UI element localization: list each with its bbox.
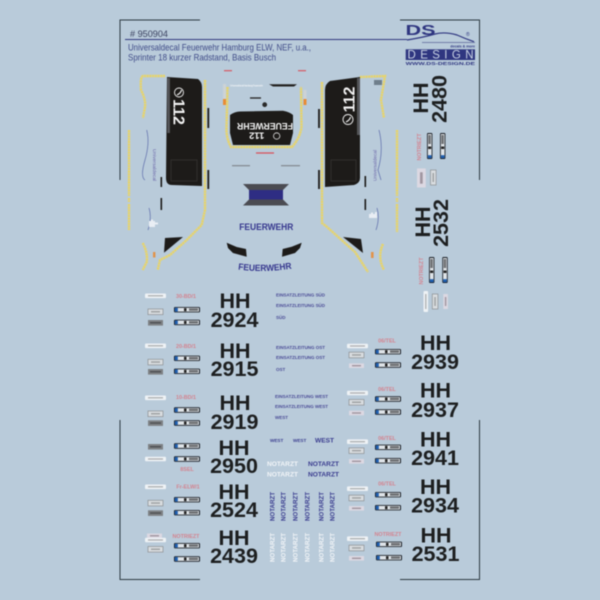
decal row: HH 2524: 2524 [210, 498, 258, 522]
yellow contour lines left [129, 76, 205, 270]
decal row: HH 2439: 2439 [210, 544, 258, 568]
logo: DS Design: DESIGN [408, 50, 474, 62]
decal row: HH 2915: HH [219, 339, 251, 363]
wiper strips [232, 165, 300, 167]
hamburg crest and wave right [376, 130, 381, 230]
decal group: einsatzleitung sud [276, 292, 326, 320]
decal row: HH 2915: 20-BD/1 [176, 344, 196, 350]
hood lettering: 112 [249, 130, 264, 140]
red marker bars [224, 71, 306, 153]
panel: front of vehicle: FEUERWEHR [238, 262, 292, 272]
small dark strips left [207, 108, 209, 189]
rotated decals for 2532: NOTRIEZT [419, 257, 425, 284]
decal row: HH 2919 [145, 391, 258, 434]
phone 112 left [170, 88, 186, 125]
decal group: horizontal notarzt [267, 461, 340, 479]
front details: Universaldecal Hamburg Feuerwehr [230, 84, 263, 88]
decal row: HH 2924: HH [219, 289, 251, 313]
plate number HH 2480 [409, 75, 452, 123]
panel: left side of vehicle [129, 76, 208, 270]
plate number HH 2532 [411, 199, 453, 247]
rotated decals for 2532 [419, 257, 448, 312]
decal group: einsatzleitung west: EINSATZLEITUNG WEST [275, 394, 328, 399]
phone 112 left: 112 [170, 99, 186, 125]
black side panel right [325, 77, 360, 187]
decal row: HH 2531 [347, 524, 459, 566]
decal row: HH 2439: NOTRIEZT [173, 534, 200, 540]
yellow contour lines right [322, 76, 397, 272]
decal row: HH 2950 [145, 436, 258, 478]
decal group: einsatzleitung west [275, 394, 328, 420]
decal row: HH 2924 [145, 289, 258, 332]
decal row: HH 2919: HH [219, 391, 251, 415]
description text: Universaldecal Feuerwehr Hamburg ELW, NEF, u.a., [128, 42, 311, 52]
decal row: HH 2439: HH [218, 526, 250, 550]
decal row: HH 2531: 2531 [412, 542, 459, 566]
decal row: HH 2937: HH [420, 378, 451, 402]
decal row: HH 2950: HH [218, 436, 250, 460]
decal group: einsatzleitung west: EINSATZLEITUNG WEST [275, 404, 328, 409]
decal row: HH 2924: 30-BD/1 [176, 294, 196, 300]
logo: DS Design: DS [406, 22, 436, 39]
decal group: einsatzleitung ost: OST [276, 367, 286, 372]
decal row: HH 2934 [347, 475, 459, 518]
window marker right [374, 80, 382, 85]
hamburg crest and wave left [142, 130, 150, 230]
decal group: einsatzleitung ost: EINSATZLEITUNG OST [276, 355, 325, 360]
phone icon hood [274, 133, 280, 139]
decal group: einsatzleitung west: WEST [275, 415, 288, 420]
yellow hood contour [226, 87, 302, 147]
plate number HH 2532: 2532 [429, 199, 453, 247]
decal row: HH 2939: 2939 [411, 350, 459, 374]
black triangle right [343, 237, 363, 253]
decal row: HH 2939 [347, 331, 459, 374]
feuerwehr blue lettering: FEUERWEHR [239, 222, 294, 232]
decal group: einsatzleitung sud: SÜD [276, 314, 286, 320]
decal row: HH 2915 [145, 339, 258, 381]
logo: DS Design: ® [466, 31, 470, 38]
plate number HH 2532: HH [411, 206, 435, 238]
decal row: HH 2919: 10-BD/1 [176, 395, 196, 401]
frame corner marks [120, 20, 480, 580]
decal group: west labels: WEST [270, 438, 283, 443]
black triangle left [164, 237, 183, 253]
decal group: horizontal notarzt: NOTARZT [267, 461, 299, 468]
decal group: vertical white notarzt: NOTARZT [318, 533, 326, 562]
decal row: HH 2937: 06/TEL [378, 387, 397, 393]
decal row: HH 2531: NOTRIEZT [375, 532, 402, 538]
decal row: HH 2939: HH [420, 331, 451, 355]
description text: Sprinter 18 kurzer Radstand, Basis Busch [128, 52, 276, 62]
decal group: vertical blue notarzt: NOTARZT [269, 492, 276, 521]
decal row: HH 2924: 2924 [211, 308, 258, 332]
decal group: vertical blue notarzt: NOTARZT [329, 492, 336, 521]
plate number HH 2480: 2480 [428, 75, 452, 123]
decal group: einsatzleitung sud: EINSATZLEITUNG SÜD [276, 302, 326, 308]
panel: left side of vehicle: Universaldecal [152, 149, 157, 181]
decal row: HH 2939: 06/TEL [378, 338, 397, 344]
decal group: vertical blue notarzt [269, 492, 336, 521]
decal row: HH 2941 [347, 428, 459, 470]
decal group: vertical blue notarzt: NOTARZT [318, 492, 326, 521]
decal group: west labels: WEST [315, 438, 334, 444]
black headlights [227, 243, 247, 257]
logo: DS Design: decals & more [450, 44, 475, 48]
panel: front of vehicle [222, 70, 308, 272]
hood lettering: FEUERWEHR [237, 121, 293, 131]
panel: right side of vehicle: Universaldecal [372, 150, 378, 181]
decal row: HH 2439 [145, 526, 258, 568]
decal group: einsatzleitung ost [276, 345, 325, 372]
decal group: vertical white notarzt: NOTARZT [280, 533, 287, 562]
decal group: vertical blue notarzt: NOTARZT [292, 492, 300, 521]
decal group: vertical white notarzt: NOTARZT [304, 533, 311, 562]
rotated decals for 2480: NOTRIEZT [417, 133, 423, 160]
phone 112 right [342, 86, 358, 124]
decal row: HH 2524: HH [218, 480, 250, 504]
decal row: HH 2941: 06/TEL [378, 436, 397, 442]
decal row: HH 2531: HH [420, 524, 452, 548]
decal group: horizontal notarzt: NOTARZT [267, 472, 299, 479]
decal row: HH 2941: 2941 [411, 446, 459, 470]
orange marker right [371, 252, 374, 258]
decal row: HH 2950: 8SEL [180, 467, 194, 473]
hood lettering [237, 121, 293, 140]
phone 112 right: 112 [342, 86, 358, 112]
plate number HH 2480: HH [409, 82, 433, 114]
decal group: vertical blue notarzt: NOTARZT [280, 492, 287, 521]
decal row: HH 2937 [347, 378, 459, 422]
decal group: vertical white notarzt: NOTARZT [292, 533, 300, 562]
decal group: horizontal notarzt: NOTARZT [308, 472, 340, 479]
decal group: vertical white notarzt: NOTARZT [269, 533, 276, 562]
header rule [125, 38, 407, 40]
decal row: HH 2915: 2915 [211, 357, 258, 381]
decal group: west labels [270, 438, 334, 444]
decal row: HH 2950: 2950 [210, 454, 258, 478]
decal group: west labels: WEST [293, 438, 306, 443]
grille [243, 184, 289, 190]
decal row: HH 2919: 2919 [211, 410, 258, 434]
decal row: HH 2934: 06/TEL [378, 482, 397, 488]
decal group: vertical white notarzt: NOTARZT [329, 533, 336, 562]
decal group: einsatzleitung sud: EINSATZLEITUNG SÜD [276, 292, 326, 298]
decal row: HH 2524: Fr-ELW/1 [176, 485, 200, 491]
decal group: einsatzleitung ost: EINSATZLEITUNG OST [276, 345, 325, 350]
decal row: HH 2934: 2934 [411, 494, 459, 518]
description text [128, 42, 311, 62]
decal group: vertical white notarzt [269, 533, 336, 562]
article number: # 950904 [130, 28, 168, 39]
decal row: HH 2941: HH [420, 428, 451, 452]
decal group: horizontal notarzt: NOTARZT [308, 461, 340, 468]
decal row: HH 2934: HH [420, 475, 451, 499]
black side panel left [166, 77, 202, 186]
decal row: HH 2937: 2937 [411, 398, 459, 422]
rotated decals for 2480 [417, 133, 445, 188]
curved feuerwehr lettering [238, 268, 292, 271]
decal row: HH 2524 [145, 480, 258, 522]
decal group: vertical blue notarzt: NOTARZT [304, 492, 311, 521]
orange marker left [153, 252, 155, 258]
logo: DS Design [406, 22, 475, 66]
small dark strips right [318, 109, 320, 189]
logo: DS Design: WWW.DS-DESIGN.DE [406, 61, 475, 66]
panel: right side of vehicle [319, 76, 397, 272]
black hood panel [230, 111, 293, 145]
